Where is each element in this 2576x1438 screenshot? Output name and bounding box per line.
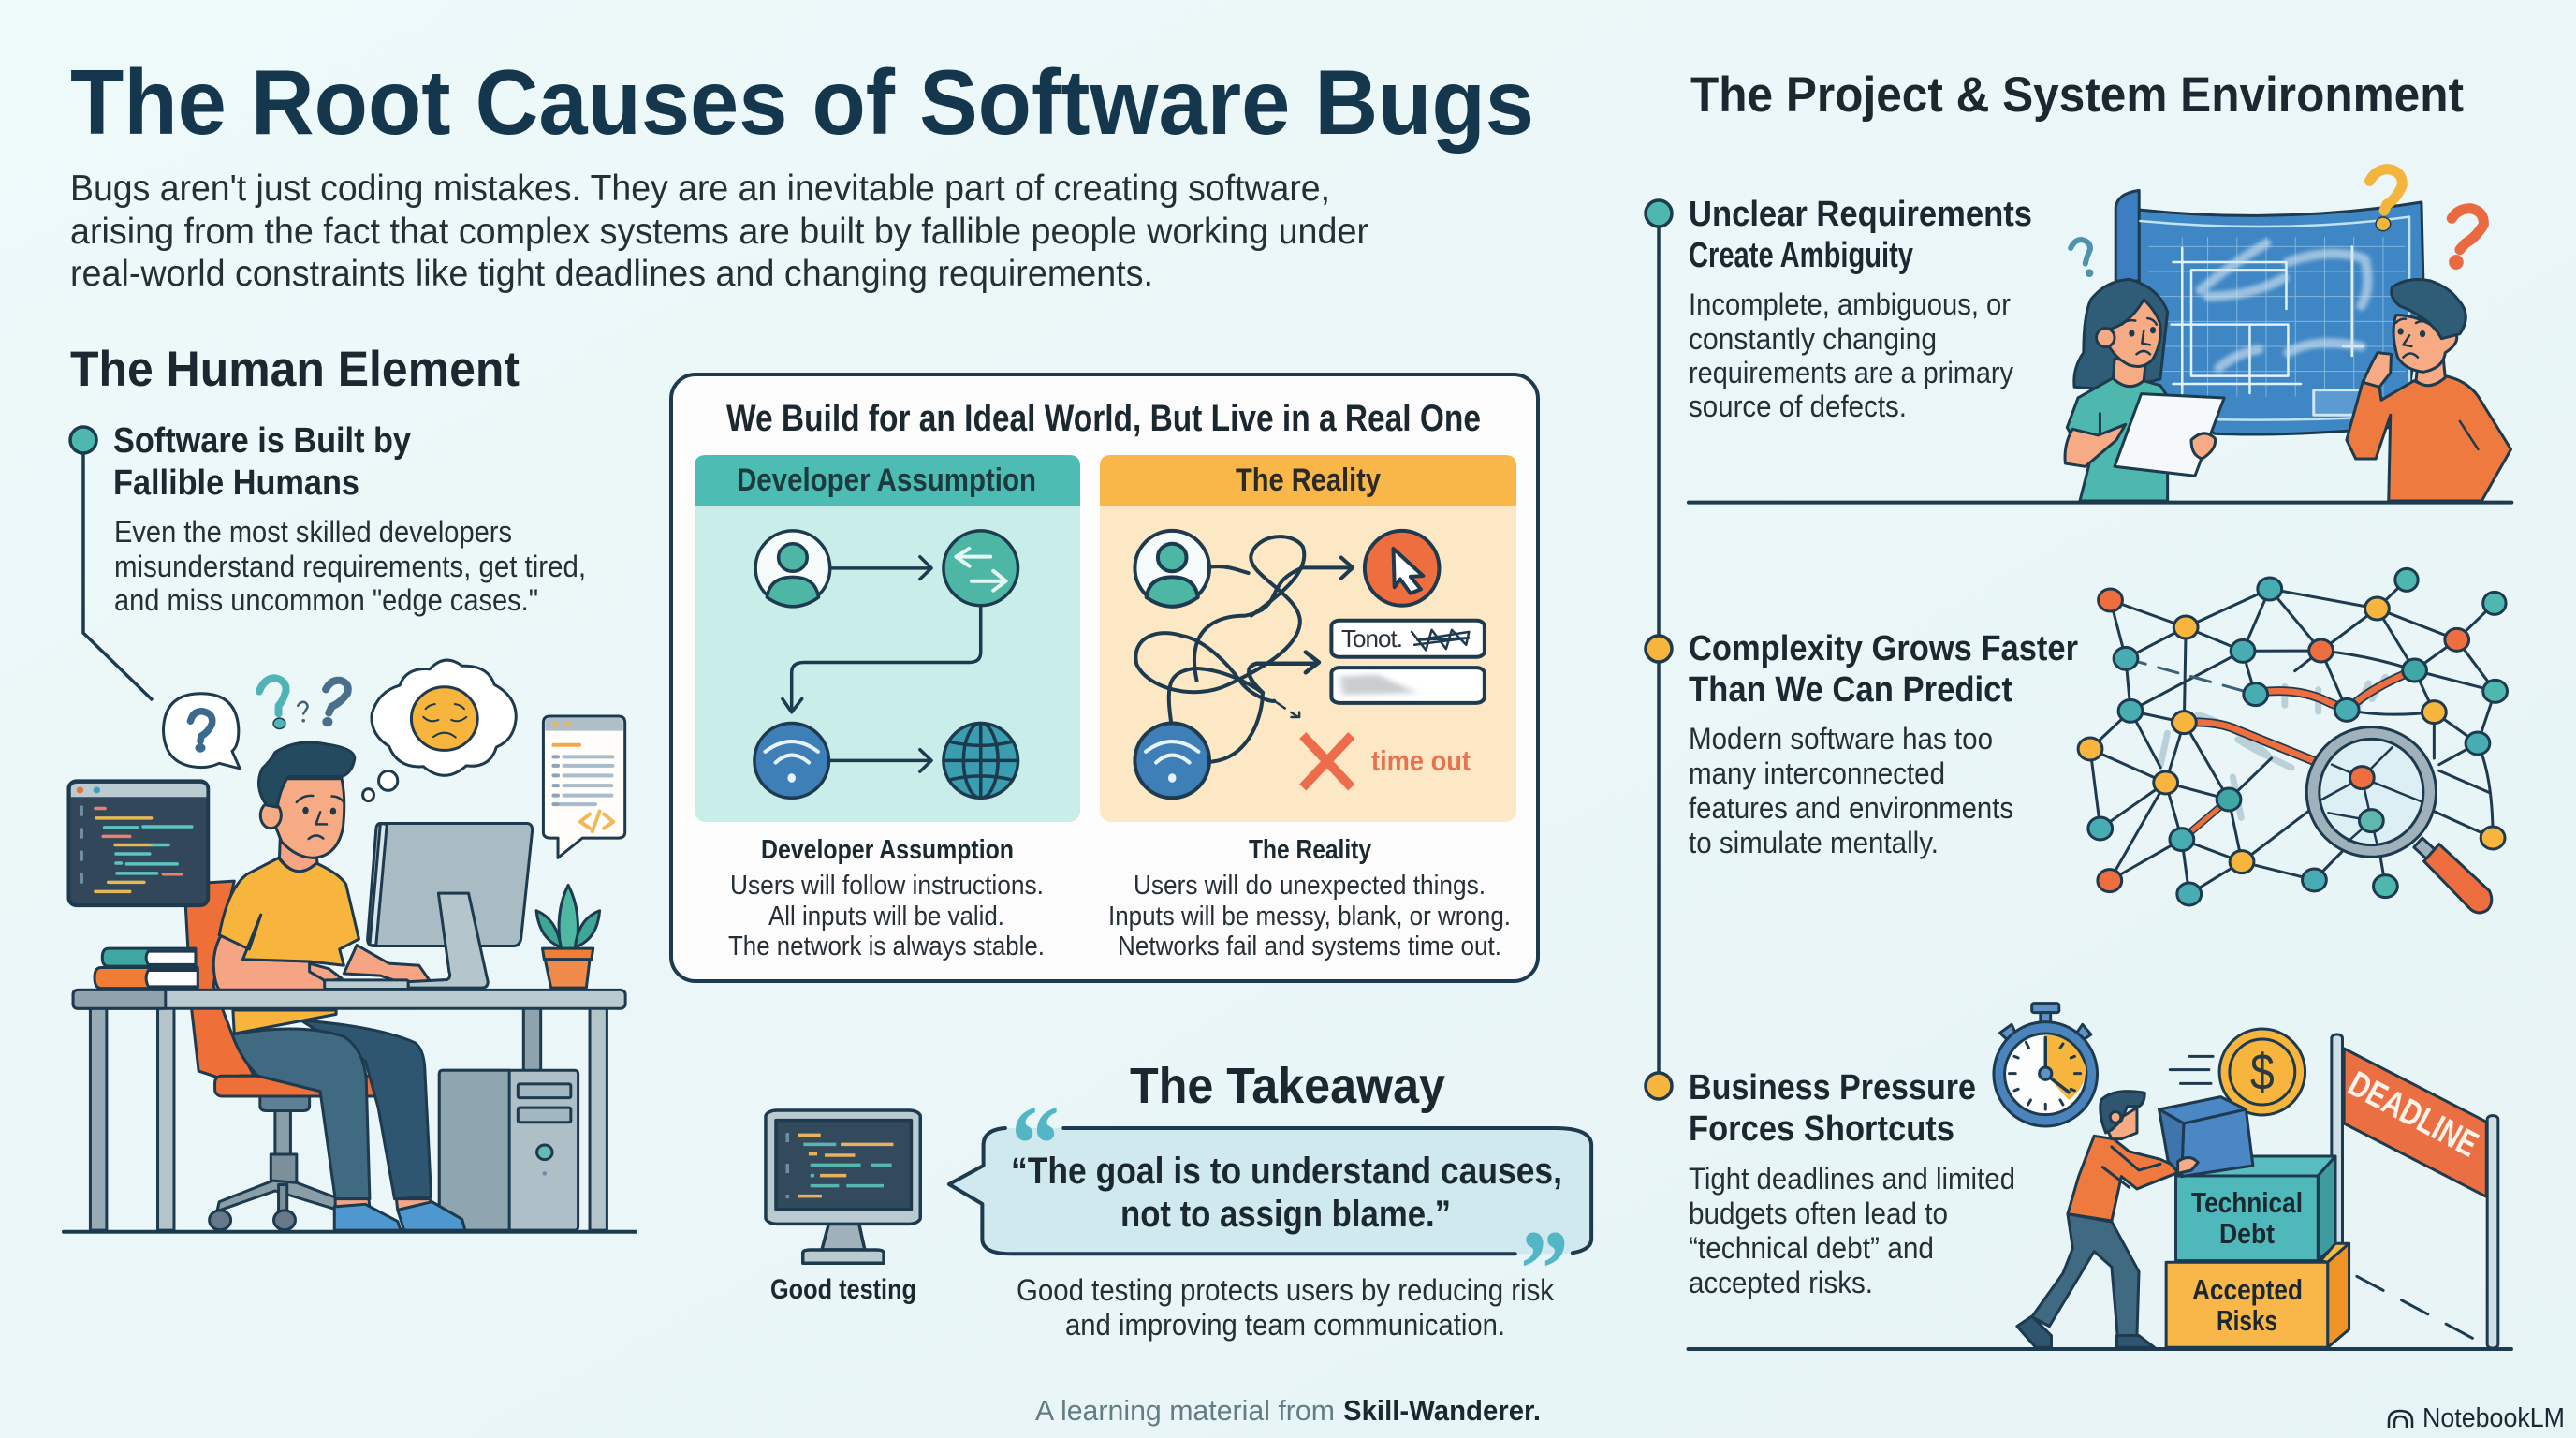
quote text — [1011, 1151, 1562, 1235]
diagram: ideal flow — [754, 531, 1018, 798]
text block: business pressure: accepted risks. — [1689, 1266, 1873, 1299]
magnifying glass — [2306, 727, 2492, 913]
text block: software is built by fallible humans: misunderstand requirements, get tired, — [114, 550, 586, 583]
text block: complexity grows: to simulate mentally. — [1689, 826, 1939, 859]
text block: software is built by fallible humans: Software is Built by — [113, 421, 411, 461]
text block: complexity grows: Than We Can Predict — [1689, 670, 2012, 710]
text block: unclear requirements: source of defects. — [1689, 389, 1907, 423]
illustration: two people confused by a blueprint — [1689, 169, 2511, 503]
panel heading: We Build for an Ideal World, But Live in a Real One — [726, 398, 1481, 439]
text block: complexity grows: Modern software has too — [1689, 722, 1993, 756]
takeaway supporting text — [1017, 1273, 1555, 1342]
text block: business pressure: “technical debt” and — [1689, 1231, 1934, 1265]
desk top — [73, 980, 625, 1008]
card: developer assumption: Developer Assumption — [737, 462, 1036, 498]
box label: accepted risks — [2192, 1273, 2303, 1337]
quote bubble — [949, 1082, 1591, 1330]
text: developer assumption list: Users will follow instructions. — [730, 871, 1044, 901]
woman with paper — [2065, 279, 2224, 501]
potted plant — [536, 885, 600, 988]
title: The Root Causes of Software Bugs — [70, 51, 1534, 154]
blueprint — [2115, 190, 2423, 434]
coin: $ — [2250, 1044, 2275, 1101]
bullet: unclear requirements — [1646, 200, 1672, 227]
card: the reality: The Reality — [1236, 462, 1381, 498]
developer head — [258, 742, 355, 872]
closing quotation mark: ” — [1520, 1208, 1569, 1330]
quote text: “The goal is to understand causes, — [1011, 1151, 1562, 1192]
text: reality list: Networks fail and systems time out. — [1118, 932, 1501, 961]
intro paragraph — [70, 169, 1368, 294]
card: the reality — [1100, 455, 1516, 822]
panel: ideal world vs real world — [671, 374, 1538, 981]
label: good testing: Good testing — [770, 1274, 916, 1305]
diagram: tangled real flow — [1134, 531, 1485, 798]
text block: business pressure: Forces Shortcuts — [1689, 1109, 1954, 1149]
bullet: complexity — [1646, 636, 1672, 662]
card: developer assumption — [695, 455, 1080, 822]
text block: software is built by fallible humans: Even the most skilled developers — [114, 515, 512, 549]
heading: the human element: The Human Element — [70, 342, 520, 397]
text: developer assumption list: All inputs will be valid. — [768, 902, 1004, 932]
takeaway supporting text: Good testing protects users by reducing risk — [1017, 1273, 1555, 1307]
text: developer assumption list: Developer Assumption — [761, 835, 1014, 865]
developer legs and shoes — [232, 1020, 465, 1230]
notebooklm logo: NotebookLM — [2422, 1403, 2565, 1433]
text: reality list: Users will do unexpected things. — [1134, 871, 1486, 901]
box label: accepted risks: Risks — [2217, 1304, 2277, 1337]
text block: business pressure — [1689, 1068, 2015, 1299]
book stack — [95, 948, 198, 989]
text block: complexity grows — [1689, 629, 2078, 859]
takeaway supporting text: and improving team communication. — [1065, 1308, 1505, 1342]
bullet: human element — [70, 427, 96, 453]
text: developer assumption list: The network is always stable. — [728, 932, 1045, 961]
illustration: deadline pressure — [1689, 1004, 2511, 1349]
box label: technical debt — [2191, 1186, 2303, 1250]
computer tower — [439, 1070, 578, 1230]
text block: software is built by fallible humans: Fallible Humans — [113, 463, 359, 503]
person pushing boxes — [2017, 1092, 2253, 1347]
text block: complexity grows: features and environments — [1689, 791, 2013, 825]
text block: business pressure: Tight deadlines and limited — [1689, 1162, 2015, 1196]
footer credit — [1035, 1394, 1541, 1427]
text block: unclear requirements: Unclear Requirements — [1689, 195, 2032, 234]
text block: unclear requirements: Incomplete, ambiguous, or — [1689, 287, 2011, 321]
footer credit: A learning material from — [1035, 1394, 1335, 1427]
quote text: not to assign blame.” — [1120, 1194, 1451, 1235]
text block: software is built by fallible humans: and miss uncommon "edge cases." — [114, 583, 538, 617]
icon: good testing monitor — [766, 1110, 920, 1263]
text block: complexity grows: Complexity Grows Faster — [1689, 629, 2078, 668]
timeline line: environment — [1657, 213, 1661, 1086]
office chair — [185, 881, 380, 1230]
man thinking — [2347, 279, 2511, 501]
thought cloud with sad face — [363, 660, 516, 801]
floating question marks — [259, 678, 348, 728]
intro paragraph: Bugs aren't just coding mistakes. They are an inevitable part of creating software, — [70, 169, 1330, 209]
sample input text: Tonot. — [1341, 624, 1403, 653]
stacked boxes — [2166, 1156, 2349, 1347]
intro paragraph: arising from the fact that complex systems are built by fallible people working under — [70, 212, 1368, 252]
bullet: business pressure — [1646, 1073, 1672, 1099]
box label: technical debt: Technical — [2191, 1186, 2303, 1219]
opening quotation mark: “ — [1011, 1082, 1060, 1205]
stopwatch — [1994, 1004, 2098, 1126]
code document speech bubble — [543, 716, 625, 858]
footer credit: Skill-Wanderer. — [1343, 1394, 1541, 1427]
network nodes — [2078, 568, 2507, 905]
text block: complexity grows: many interconnected — [1689, 756, 1945, 790]
developer torso and arms — [213, 858, 429, 1034]
text: reality list: The Reality — [1249, 835, 1371, 865]
timeline connector: human element — [83, 453, 153, 700]
label: time out: time out — [1371, 744, 1471, 777]
code window — [68, 781, 208, 905]
illustration: network with magnifying glass — [2078, 568, 2507, 913]
text block: unclear requirements: Create Ambiguity — [1689, 236, 1913, 275]
text block: unclear requirements — [1689, 195, 2032, 423]
desktop monitor — [368, 824, 533, 988]
box label: accepted risks: Accepted — [2192, 1273, 2303, 1306]
question marks — [2071, 169, 2483, 277]
text: developer assumption list — [728, 835, 1045, 961]
text block: business pressure: budgets often lead to — [1689, 1196, 1948, 1230]
box label: technical debt: Debt — [2219, 1217, 2275, 1250]
text block: business pressure: Business Pressure — [1689, 1068, 1976, 1108]
illustration: confused developer at desk — [64, 660, 636, 1232]
speed lines — [2170, 1056, 2213, 1083]
text: reality list: Inputs will be messy, blank, or wrong. — [1108, 902, 1511, 932]
text: reality list — [1108, 835, 1511, 961]
question speech bubble — [163, 694, 240, 769]
intro paragraph: real-world constraints like tight deadlines and changing requirements. — [70, 254, 1153, 294]
banner text: deadline: DEADLINE — [2342, 1064, 2484, 1165]
text block: unclear requirements: requirements are a primary — [1689, 356, 2013, 389]
text block: unclear requirements: constantly changing — [1689, 322, 1937, 356]
heading: the takeaway: The Takeaway — [1130, 1058, 1445, 1114]
signpost and dashed line — [2332, 1034, 2498, 1348]
text block: software is built by fallible humans — [113, 421, 586, 617]
heading: the project and system environment: The Project & System Environment — [1690, 67, 2464, 123]
coin — [2219, 1029, 2305, 1115]
